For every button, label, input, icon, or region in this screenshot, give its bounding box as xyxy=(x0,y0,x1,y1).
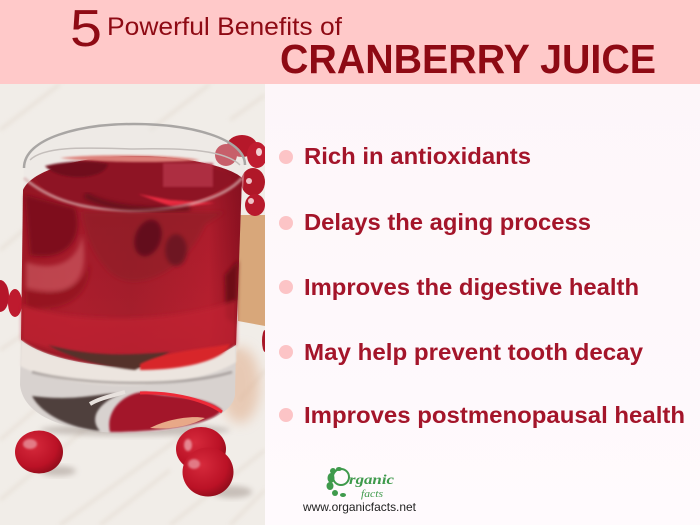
header band xyxy=(0,0,700,84)
benefit 3: Improves the digestive health xyxy=(304,274,639,300)
logo sub wordmark: facts xyxy=(361,488,383,500)
photo: glass of cranberry juice on white wood xyxy=(0,84,268,525)
shadow of glass xyxy=(40,424,230,436)
benefit 1: Rich in antioxidants xyxy=(304,143,531,169)
logo: organic facts xyxy=(302,467,417,514)
benefit 2: Delays the aging process xyxy=(304,209,591,235)
title: powerful benefits of: Powerful Benefits of xyxy=(107,13,342,41)
berries behind glass xyxy=(215,135,267,216)
berries at left edge xyxy=(0,280,268,352)
juice surface xyxy=(42,170,222,208)
glass rim and upper wall xyxy=(23,124,245,190)
title: number 5: 5 xyxy=(70,0,102,58)
juice reflections xyxy=(22,195,238,358)
logo wordmark: rganic xyxy=(349,473,395,488)
wooden scoop xyxy=(236,215,265,326)
title: cranberry juice: CRANBERRY JUICE xyxy=(280,36,656,82)
icon: leaf wreath xyxy=(326,467,349,497)
benefit 5: Improves postmenopausal health xyxy=(304,402,685,428)
juice xyxy=(21,156,242,372)
cranberries in front xyxy=(15,427,252,498)
glass base xyxy=(20,340,236,433)
website url: www.organicfacts.net xyxy=(302,500,417,514)
benefit 4: May help prevent tooth decay xyxy=(304,339,643,365)
